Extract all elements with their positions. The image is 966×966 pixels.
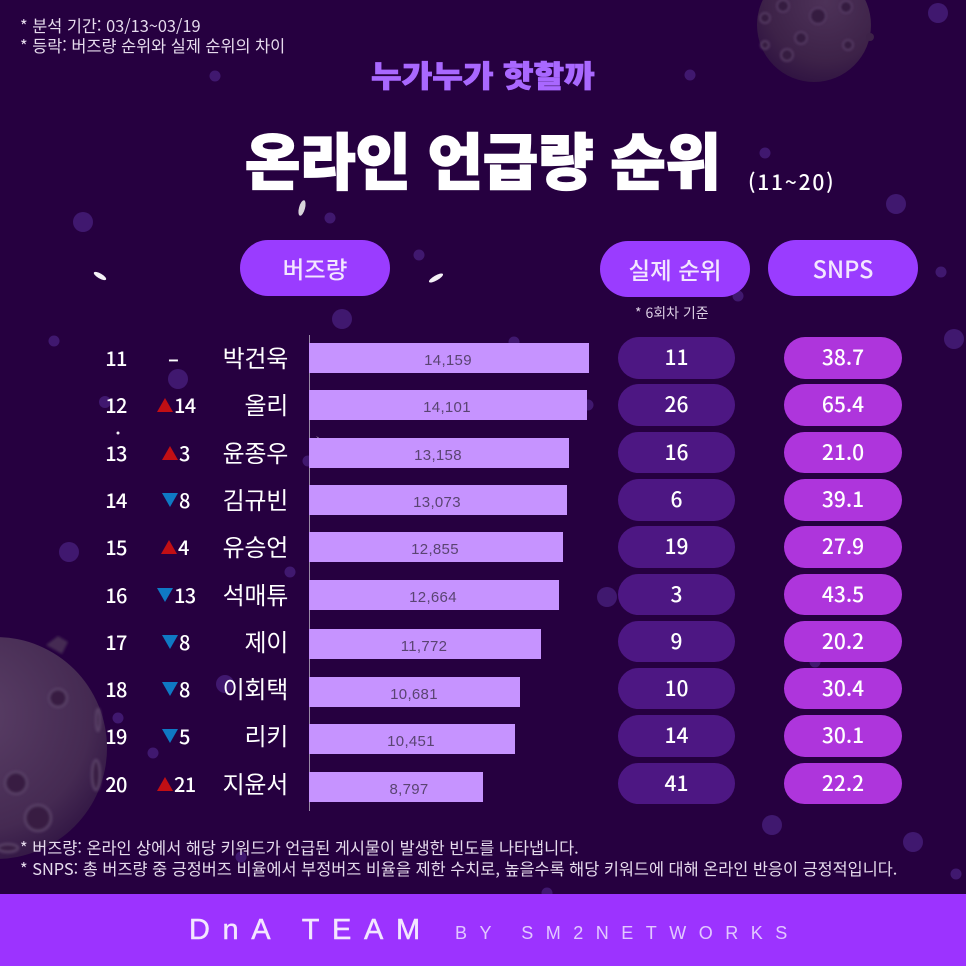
row 20: 21 [174, 768, 196, 798]
top notes [20, 13, 285, 57]
row 20: 41 [665, 768, 688, 798]
row 17: 9 [670, 626, 682, 656]
row 14: 8 [179, 485, 190, 514]
column header: SNPS [768, 240, 918, 296]
row 11 [105, 337, 902, 379]
row 20: 20 [105, 768, 127, 798]
row 20: 지윤서 [223, 764, 288, 800]
title range: (11~20) [748, 167, 835, 197]
row 14: 39.1 [822, 484, 864, 514]
row 12: 12 [105, 390, 127, 419]
row 17: 8 [179, 626, 190, 656]
row 17: 제이 [244, 622, 288, 658]
row 16: 16 [105, 580, 127, 608]
column header: buzz: 버즈량 [283, 251, 347, 285]
row 20 [105, 763, 902, 804]
row 17 [105, 621, 902, 662]
row 11: 11 [665, 342, 688, 372]
row 19: 5 [179, 721, 190, 750]
row 11: – [168, 343, 178, 372]
row 16: 43.5 [822, 578, 864, 608]
row 13: 13,158 [414, 446, 462, 464]
row 17: 20.2 [822, 626, 864, 656]
row 18: 10 [665, 672, 688, 702]
row 12: 65.4 [822, 389, 864, 419]
row 19: 30.1 [822, 720, 864, 750]
note: episode basis: * 6회차 기준 [635, 303, 709, 323]
row 19 [105, 715, 902, 757]
row 14: 김규빈 [223, 481, 288, 516]
row 19: 14 [665, 720, 688, 750]
row 12: 26 [665, 389, 688, 419]
column header: buzz [240, 240, 390, 296]
row 14: 14 [105, 485, 127, 514]
footer bar [0, 894, 966, 966]
row 16 [105, 574, 902, 615]
column header: actual rank: 실제 순위 [628, 252, 722, 286]
row 13: 3 [179, 438, 190, 466]
row 14 [105, 479, 902, 521]
row 15 [105, 526, 902, 568]
row 16: 석매튜 [223, 576, 288, 610]
row 11: 박건욱 [223, 339, 288, 374]
row 15: 유승언 [223, 528, 288, 563]
row 13: 13 [105, 438, 127, 466]
note: SNPS definition: * SNPS: 총 버즈량 중 긍정버즈 비율에서 부정버즈 비율을 제한 수치로, 높을수록 해당 키워드에 대해 온라인 반응이 긍정적입니다. [20, 856, 897, 880]
row 16: 3 [670, 578, 682, 608]
note: rank change: * 등락: 버즈량 순위와 실제 순위의 차이 [20, 33, 285, 57]
bottom notes [20, 835, 897, 880]
row 11: 11 [105, 343, 127, 372]
row 18: 이회택 [223, 670, 288, 704]
row 14: 13,073 [413, 494, 461, 511]
subtitle: 누가누가 핫할까 [371, 52, 595, 96]
row 12: 14 [174, 390, 196, 419]
row 13: 16 [665, 436, 688, 466]
row 17: 11,772 [401, 638, 447, 655]
row 18: 8 [179, 674, 190, 702]
row 13 [105, 432, 902, 473]
row 12: 올리 [244, 386, 288, 421]
title: 온라인 언급량 순위 [245, 113, 721, 202]
note: analysis period: * 분석 기간: 03/13~03/19 [20, 13, 201, 37]
row 19: 리키 [244, 717, 288, 752]
row 16: 12,664 [409, 588, 457, 606]
row 18: 18 [105, 674, 127, 702]
row 19: 19 [105, 721, 127, 750]
row 15: 12,855 [411, 541, 459, 558]
footer team name: DnA TEAM [189, 914, 433, 946]
row 18: 10,681 [390, 686, 438, 702]
row 17: 17 [105, 626, 127, 656]
row 15: 27.9 [822, 531, 864, 561]
row 13: 21.0 [822, 436, 864, 466]
row 15: 4 [178, 532, 189, 561]
row 11: 38.7 [822, 342, 864, 372]
row 14: 6 [670, 484, 682, 514]
icon: top right planet [757, 0, 874, 82]
note: buzz definition: * 버즈량: 온라인 상에서 해당 키워드가 언급된 게시물이 발생한 빈도를 나타냅니다. [20, 835, 579, 859]
row 19: 10,451 [387, 733, 435, 750]
column header: actual rank [600, 241, 750, 297]
row 15: 19 [665, 531, 688, 561]
row 20: 8,797 [389, 780, 429, 798]
row 13: 윤종우 [223, 434, 288, 468]
row 18: 30.4 [822, 672, 864, 702]
axis [308, 335, 310, 811]
row 20: 22.2 [822, 768, 864, 798]
icon: bottom left planet [0, 636, 107, 859]
row 12: 14,101 [423, 399, 471, 416]
column header: SNPS: SNPS [813, 251, 873, 285]
footer company: BY SM2NETWORKS [455, 923, 800, 943]
row 12 [105, 384, 902, 426]
row 16: 13 [174, 580, 196, 608]
row 18 [105, 668, 902, 709]
row 15: 15 [105, 532, 127, 561]
row 11: 14,159 [424, 352, 472, 369]
